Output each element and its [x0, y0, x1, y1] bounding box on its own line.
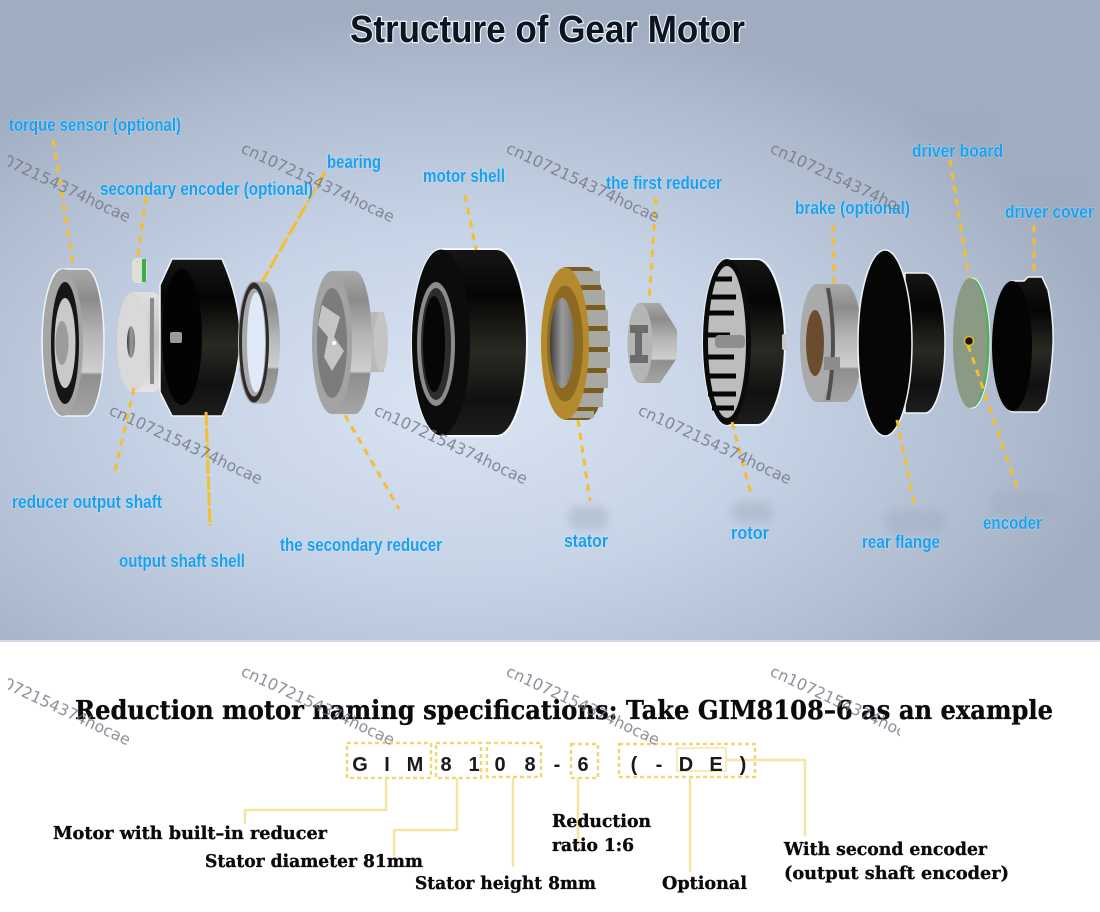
labels: gear motor parts: bearing — [327, 151, 381, 172]
diagram: model code GIM8108-6 (-DE): - — [554, 754, 560, 776]
labels: gear motor parts: the secondary reducer — [280, 534, 442, 555]
component: driver board — [953, 278, 990, 408]
labels: gear motor parts: secondary encoder (optional) — [100, 178, 313, 199]
labels: gear motor parts: the first reducer — [606, 172, 722, 193]
diagram: model code GIM8108-6 (-DE) — [245, 743, 805, 872]
component: brake — [800, 284, 862, 402]
watermark: repeated seller id: cn1072154374hocae — [503, 661, 663, 749]
component: the first reducer — [628, 303, 677, 383]
component: bearing — [238, 282, 280, 404]
labels: gear motor parts: stator — [564, 530, 608, 551]
labels: gear motor parts: brake (optional) — [795, 197, 910, 218]
labels: gear motor parts — [9, 114, 1094, 571]
annotations: naming meanings: Reduction — [552, 811, 651, 832]
component: driver cover — [992, 277, 1053, 412]
diagram: model code GIM8108-6 (-DE): 8 — [524, 754, 536, 776]
annotations: naming meanings: Motor with built–in reducer — [53, 823, 327, 844]
annotations: naming meanings: Optional — [662, 873, 747, 894]
annotations: naming meanings: (output shaft encoder) — [784, 863, 1009, 884]
leader lines — [53, 140, 1034, 526]
component: motor shell — [412, 249, 527, 436]
heading: naming specifications: Reduction motor naming specifications: Take GIM8108–6 as an example — [75, 696, 1053, 726]
diagram: model code GIM8108-6 (-DE): D — [679, 754, 693, 776]
watermark: repeated seller id: cn1072154374hocae — [767, 138, 927, 226]
diagram: model code GIM8108-6 (-DE): E — [709, 754, 723, 776]
labels: gear motor parts: motor shell — [423, 165, 505, 186]
diagram: model code GIM8108-6 (-DE): G — [352, 754, 368, 776]
watermark: repeated seller id: cn1072154374hocae — [767, 661, 927, 749]
watermark: repeated seller id: cn1072154374hocae — [238, 138, 398, 226]
watermark: repeated seller id: cn1072154374hocae — [106, 400, 266, 488]
watermark: repeated seller id — [0, 138, 927, 749]
diagram: model code GIM8108-6 (-DE): 1 — [468, 754, 480, 776]
component: output shaft shell — [160, 259, 240, 416]
component: reducer output shaft — [117, 292, 167, 392]
component: torque sensor — [42, 269, 104, 416]
diagram: model code GIM8108-6 (-DE): I — [384, 754, 390, 776]
diagram: model code GIM8108-6 (-DE): 6 — [577, 754, 589, 776]
component: rear flange — [858, 250, 945, 436]
labels: gear motor parts: torque sensor (optional) — [9, 114, 181, 135]
diagram: model code GIM8108-6 (-DE): M — [407, 754, 423, 776]
watermark: repeated seller id: cn1072154374hocae — [238, 661, 398, 749]
annotations: naming meanings: Stator height 8mm — [415, 873, 596, 894]
component: the secondary reducer — [312, 271, 388, 414]
watermark: repeated seller id: cn1072154374hocae — [635, 400, 795, 488]
diagram: model code GIM8108-6 (-DE): 8 — [440, 754, 452, 776]
annotations: naming meanings: Stator diameter 81mm — [205, 851, 423, 872]
diagram: model code GIM8108-6 (-DE): 0 — [494, 754, 506, 776]
diagram: model code GIM8108-6 (-DE): - — [656, 754, 662, 776]
diagram: model code GIM8108-6 (-DE): ( — [631, 754, 638, 776]
component: rotor — [703, 259, 787, 425]
labels: gear motor parts: reducer output shaft — [12, 491, 162, 512]
labels: gear motor parts: encoder — [983, 512, 1042, 533]
title: Structure of Gear Motor: Structure of Gear Motor — [350, 9, 745, 51]
labels: gear motor parts: rotor — [731, 522, 769, 543]
labels: gear motor parts: driver board — [912, 140, 1003, 161]
panel: motor structure background — [0, 0, 1100, 642]
component: stator — [541, 267, 610, 420]
annotations: naming meanings — [53, 811, 1009, 894]
component: secondary encoder — [132, 258, 147, 283]
labels: gear motor parts: output shaft shell — [119, 550, 245, 571]
labels: gear motor parts: rear flange — [862, 531, 940, 552]
annotations: naming meanings: With second encoder — [783, 839, 987, 860]
watermark: repeated seller id: cn1072154374hocae — [371, 400, 531, 488]
diagram: model code GIM8108-6 (-DE): ) — [740, 754, 746, 776]
annotations: naming meanings: ratio 1:6 — [552, 835, 634, 856]
watermark: repeated seller id: cn1072154374hocae — [503, 138, 663, 226]
